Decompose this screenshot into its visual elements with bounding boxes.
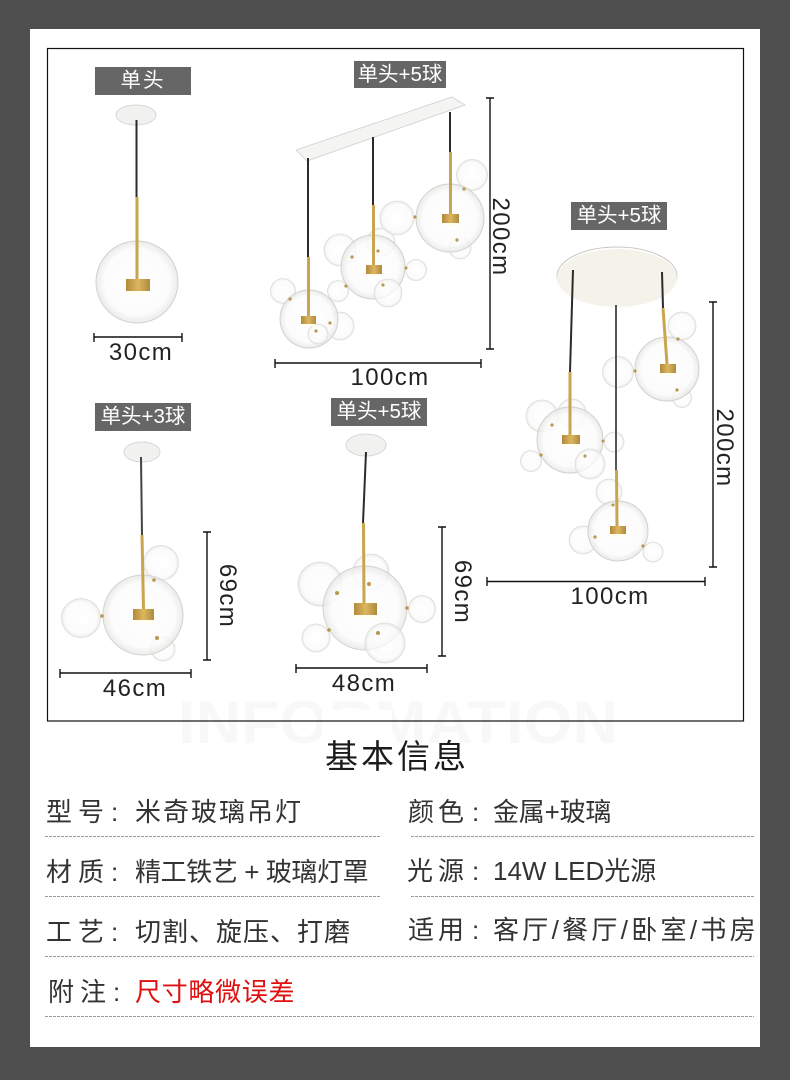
ceiling canopy (124, 442, 160, 462)
width dimension (94, 333, 182, 366)
cord (136, 120, 138, 197)
height dimension: 200cm (487, 197, 514, 277)
spec: usage: 客厅/餐厅/卧室/书房 (493, 915, 759, 945)
spec: model: 米奇玻璃吊灯 (135, 797, 303, 827)
label: 单头+5球 (358, 63, 442, 86)
bubble cluster left (520, 399, 624, 479)
spec: material: 材 (46, 857, 72, 887)
lamp: single head plus 3 balls (60, 403, 241, 702)
spec: material: 精工铁艺 + 玻璃灯罩 (135, 857, 368, 887)
spec: note: : (113, 977, 120, 1007)
spec: craft: 艺 (78, 917, 104, 947)
spec: model: : (111, 797, 118, 827)
bubble cluster left (270, 278, 354, 348)
lamp: single head (94, 67, 191, 366)
spec: light source: 14W LED光源 (493, 856, 656, 886)
spec: model: 号 (78, 797, 104, 827)
spec: light source: : (472, 856, 479, 886)
glass globe (96, 241, 178, 323)
height dimension (203, 532, 241, 660)
label: single head: 单头 (120, 69, 166, 92)
heading: basic information: 基本信息 (325, 738, 469, 775)
width dimension (275, 359, 481, 391)
ceiling canopy (116, 105, 156, 125)
cords and rods (308, 112, 450, 316)
width dimension: 30cm (109, 339, 173, 366)
height dimension: 69cm (214, 564, 241, 628)
watermark: INFORMATION (178, 689, 618, 756)
label: 单头+5球 (577, 204, 661, 227)
bubble cluster right (380, 160, 488, 259)
bubble cluster bottom (569, 479, 663, 562)
lamp: linear three pendants (270, 61, 514, 391)
gold rod (362, 523, 366, 603)
height dimension (709, 302, 738, 567)
spec: material: 质 (78, 857, 104, 887)
width dimension: 100cm (570, 583, 650, 610)
cord (141, 457, 142, 535)
gold rod (142, 535, 144, 609)
spec: light source: 源 (438, 856, 464, 886)
cords and rods (570, 270, 667, 526)
height dimension: 200cm (711, 408, 738, 488)
spec: usage: 适 (408, 915, 434, 945)
lamp: round canopy three pendants (487, 202, 738, 610)
width dimension: 48cm (332, 670, 396, 697)
height dimension (486, 98, 514, 349)
dimensions frame (48, 48, 744, 721)
width dimension (487, 577, 705, 610)
spec: craft: 切割、旋压、打磨 (135, 917, 351, 947)
spec: colour: : (472, 797, 479, 827)
width dimension: 46cm (103, 675, 167, 702)
spec: note: 尺寸略微误差 (135, 977, 295, 1007)
glass bubbles (62, 546, 183, 661)
bubble cluster middle (324, 228, 426, 307)
spec: usage: : (472, 915, 479, 945)
bubble cluster right (602, 312, 699, 408)
spec: colour: 颜 (408, 797, 434, 827)
spec: model: 型 (46, 797, 72, 827)
width dimension (60, 669, 191, 702)
lamp: single head plus 5 balls (296, 398, 476, 697)
width dimension: 100cm (350, 364, 430, 391)
cord (363, 452, 366, 523)
spec: usage: 用 (438, 915, 464, 945)
spec: colour: 金属+玻璃 (493, 797, 611, 827)
spec: craft: : (111, 917, 118, 947)
glass bubbles (298, 554, 436, 663)
spec: material: : (111, 857, 118, 887)
label: 单头+3球 (101, 405, 185, 428)
spec: note: 注 (80, 977, 106, 1007)
gold rod (136, 197, 138, 279)
spec: colour: 色 (438, 797, 464, 827)
width dimension (296, 664, 427, 697)
label: single head (95, 67, 191, 95)
spec: light source: 光 (407, 856, 433, 886)
label: 单头+5球 (337, 400, 421, 423)
height dimension: 69cm (449, 560, 476, 624)
ceiling bar (296, 97, 465, 161)
spec: note: 附 (48, 977, 74, 1007)
ceiling canopy (346, 434, 386, 456)
height dimension (438, 527, 476, 656)
round canopy (557, 247, 677, 307)
gold lamp cup (126, 279, 150, 294)
spec: craft: 工 (46, 917, 72, 947)
